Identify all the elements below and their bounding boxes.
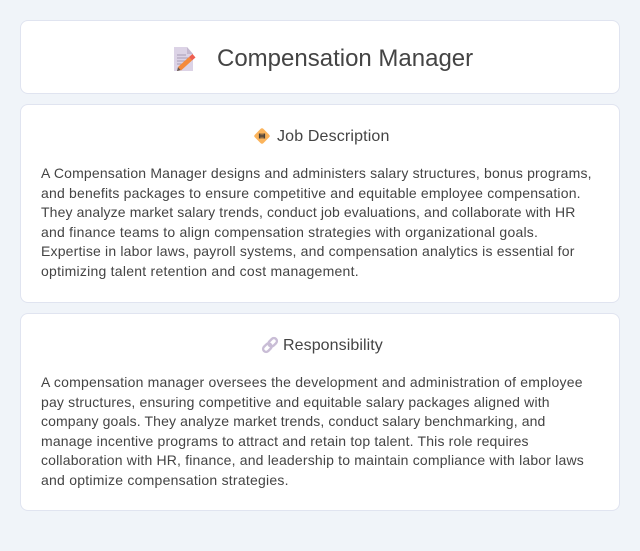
- heading: responsibility: Responsibility: [283, 337, 383, 354]
- text block: job description: They analyze market salary trends, conduct job evaluations, and collaborate with HR: [41, 204, 575, 220]
- icon: document with pencil: [174, 47, 196, 71]
- title: Compensation Manager: [217, 45, 473, 72]
- text block: responsibility: collaboration with HR, finance, and leadership to maintain compliance with labor laws: [41, 452, 584, 468]
- text block: responsibility: A compensation manager oversees the development and administration of employee: [41, 374, 583, 390]
- text block: job description: optimizing talent retention and cost management.: [41, 262, 359, 278]
- text block: job description: and finance teams to align compensation strategies with organizational goals.: [41, 224, 538, 240]
- text block: responsibility: company goals. They analyze market trends, conduct salary benchmarking, and: [41, 413, 545, 429]
- panel: job description: [20, 104, 620, 303]
- text block: responsibility: manage incentive programs to attract and retain top talent. This role requires: [41, 432, 529, 448]
- panel: responsibility: [20, 313, 620, 511]
- text block: job description: Expertise in labor laws, payroll systems, and compensation analytics is essential for: [41, 243, 575, 259]
- text block: responsibility: pay structures, ensuring competitive and equitable salary packages aligned with: [41, 394, 550, 410]
- text block: responsibility: [41, 374, 584, 488]
- text block: job description: and benefits packages to ensure competitive and equitable employee compensation.: [41, 184, 581, 200]
- text block: job description: A Compensation Manager designs and administers salary structures, bonus programs,: [41, 165, 592, 181]
- icon: chain link: [262, 336, 278, 354]
- text block: job description: [41, 165, 592, 279]
- panel: title card: [20, 20, 620, 94]
- text block: responsibility: and optimize compensation strategies.: [41, 472, 289, 488]
- heading: job description: Job Description: [277, 128, 390, 145]
- icon: diamond sign: [254, 128, 270, 144]
